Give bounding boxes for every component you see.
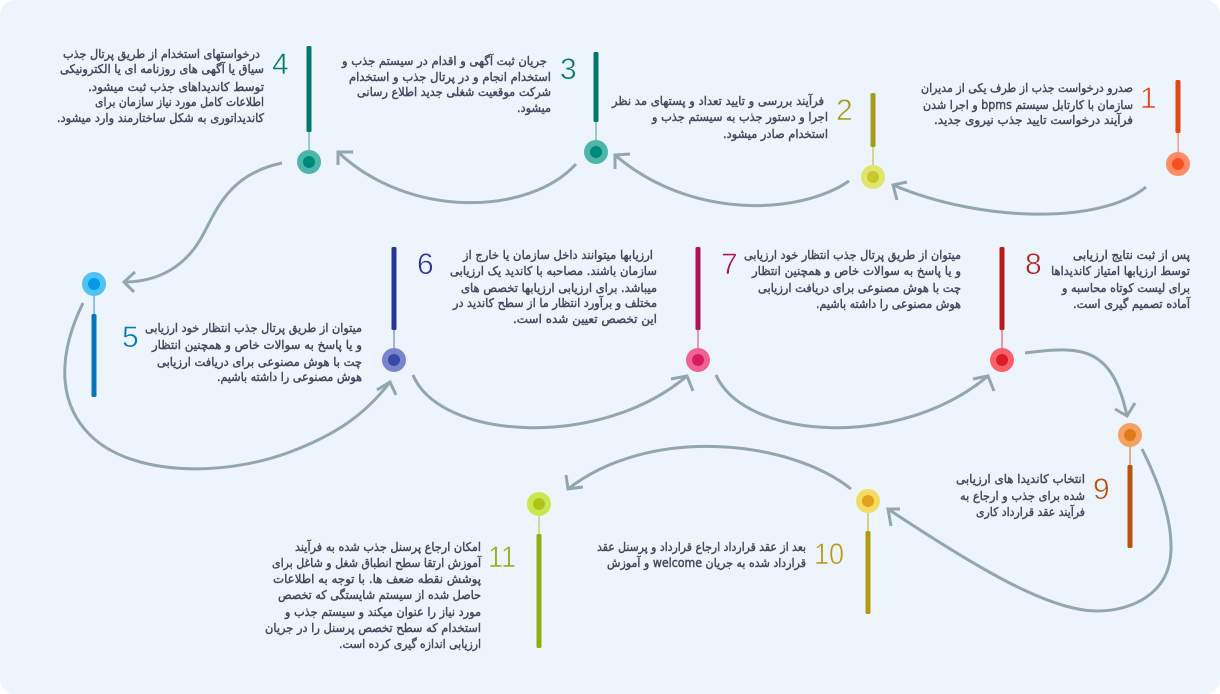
text 1: صدرو درخواست جذب از طرف یکی از مدیران (921, 81, 1133, 96)
text 5: چت با هوش مصنوعی برای دریافت ارزیابی (157, 355, 362, 370)
step 8 (990, 247, 1191, 372)
text 4: اطلاعات کامل مورد نیاز سازمان برای (95, 95, 264, 110)
marker 3 (584, 52, 608, 164)
number 11: 11 (488, 541, 516, 574)
marker 6 (382, 247, 406, 372)
text 7 (744, 248, 961, 312)
number 5: 5 (122, 321, 139, 354)
text 11 (265, 539, 482, 652)
step 4 (57, 46, 321, 174)
number 7: 7 (721, 248, 738, 281)
text 3: جریان ثبت آگهی و اقدام در سیستم جذب و (341, 53, 547, 69)
marker 10 (856, 489, 880, 614)
text 11: امکان ارجاع پرسنل جذب شده به فرآیند (295, 539, 481, 555)
text 5: و یا پاسخ به سوالات خاص و همچنین انتظار (151, 338, 362, 353)
step 11 (265, 492, 551, 652)
text 8: پس از ثبت نتایج ارزیابی (1073, 248, 1190, 263)
text 7: هوش مصنوعی را داشته باشیم. (816, 297, 961, 312)
text 11: آموزش ارتقا سطح انطباق شغل و شاغل برای (272, 555, 482, 571)
marker 8 (990, 247, 1014, 372)
text 4: توسط کاندیداهای جذب ثبت میشود. (88, 80, 264, 95)
text 9: انتخاب کاندیدا های ارزیابی (956, 472, 1085, 487)
text 6: میباشد. برای ارزیابی ارزیابها تخصص های (461, 281, 657, 296)
marker 7 (686, 247, 710, 372)
step 2 (611, 93, 885, 189)
number 8: 8 (1025, 248, 1042, 281)
text 7: چت با هوش مصنوعی برای دریافت ارزیابی (758, 281, 961, 296)
number 1: 1 (1140, 82, 1157, 115)
number 9: 9 (1093, 473, 1110, 506)
text 4: درخواستهای استخدام از طریق پرتال جذب (63, 47, 260, 62)
step 1 (921, 80, 1190, 176)
text 2 (611, 93, 828, 142)
text 10 (597, 540, 806, 571)
text 2: فرآیند بررسی و تایید تعداد و پستهای مد نظر (611, 93, 824, 109)
marker 9 (1118, 423, 1142, 548)
step 5 (82, 272, 362, 397)
arrow: step 2 to 3 (615, 154, 849, 206)
arrow: step 3 to 4 (338, 152, 576, 203)
text 11: ارزیابی اندازه گیری کرده است. (339, 637, 481, 652)
number 10: 10 (814, 538, 844, 571)
text 4: کاندیداتوری به شکل ساختارمند وارد میشود. (57, 111, 264, 126)
text 6: مختلف و برآورد انتظار ما از سطح کاندید در (452, 295, 657, 311)
text 6: ارزیابها میتوانند داخل سازمان یا خارج از (462, 248, 653, 263)
step 7 (686, 247, 961, 372)
text 9 (956, 472, 1085, 520)
text 3 (341, 53, 551, 116)
arrow: step 6 to 7 (413, 375, 693, 428)
text 6: سازمان باشند. مصاحبه با کاندید یک ارزیابی (450, 264, 657, 279)
text 7: میتوان از طریق پرتال جذب انتظار خود ارزیابی (744, 248, 961, 263)
text 7: و یا پاسخ به سوالات خاص و همچنین انتظار (751, 264, 961, 279)
arrow: step 5 to 6 (65, 303, 396, 469)
arrow: step 10 to 11 (566, 446, 851, 489)
text 5 (145, 321, 362, 385)
marker 11 (527, 492, 551, 648)
text 11: پوشش نقطه ضعف ها. با توجه به اطلاعات (273, 572, 481, 587)
number 3: 3 (560, 53, 577, 86)
step 6 (382, 247, 657, 372)
text 6: این تخصص تعیین شده است. (513, 312, 657, 327)
marker 4 (297, 46, 321, 174)
number 6: 6 (417, 248, 434, 281)
text 1: سازمان با کارتابل سیستم bpms و اجرا شدن (923, 98, 1133, 113)
marker 5 (82, 272, 106, 397)
number 4: 4 (272, 48, 289, 81)
text 11: استخدام که سطح تخصص پرسنل را در جریان (265, 621, 481, 636)
text 9: شده برای جذب و ارجاع به (960, 489, 1085, 504)
text 3: شرکت موقعیت شغلی جدید اطلاع رسانی (357, 85, 551, 100)
text 4 (57, 47, 264, 126)
text 8: توسط ارزیابها امتیاز کاندیداها (1051, 264, 1190, 279)
arrow: step 7 to 8 (716, 375, 994, 428)
text 4: سیاق یا آگهی های روزنامه ای یا الکترونیکی (60, 61, 264, 77)
text 3: استخدام انجام و در پرتال جذب و استخدام (349, 70, 551, 85)
text 8: آماده تصمیم گیری است. (1073, 296, 1191, 312)
marker 1 (1166, 80, 1190, 176)
arrow: step 8 to 9 (1025, 350, 1135, 416)
text 3: میشود. (517, 101, 551, 116)
text 9: فرآیند عقد قرارداد کاری (976, 504, 1085, 520)
text 1 (921, 81, 1133, 128)
text 6 (450, 248, 657, 327)
arrow: step 9 to 10 (888, 449, 1171, 611)
number 2: 2 (836, 94, 853, 127)
text 1: فرآیند درخواست تایید جذب نیروی جدید. (934, 112, 1133, 128)
text 11: مورد نیاز را عنوان میکند و سیستم جذب و (284, 605, 481, 620)
text 11: حاصل شده از سیستم شایستگی که تخصص (278, 588, 481, 603)
text 8 (1051, 248, 1191, 312)
text 2: اجرا و دستور جذب به سیستم جذب و (651, 110, 828, 125)
arrow: step 1 to 2 (893, 182, 1146, 214)
step 3 (341, 52, 608, 164)
text 5: میتوان از طریق پرتال جذب انتظار خود ارزیابی (145, 321, 362, 336)
arrow: step 4 to 5 (124, 163, 282, 292)
step 10 (597, 489, 880, 614)
text 10: بعد از عقد قرارداد ارجاع قرارداد و پرسنل عقد (597, 540, 806, 555)
step 9 (956, 423, 1142, 548)
text 2: استخدام صادر میشود. (723, 127, 828, 142)
text 8: برای لیست کوتاه محاسبه و (1061, 281, 1190, 296)
text 5: هوش مصنوعی را داشته باشیم. (217, 370, 362, 385)
marker 2 (861, 93, 885, 189)
text 10: قرارداد شده به جریان welcome و آموزش (607, 555, 806, 571)
